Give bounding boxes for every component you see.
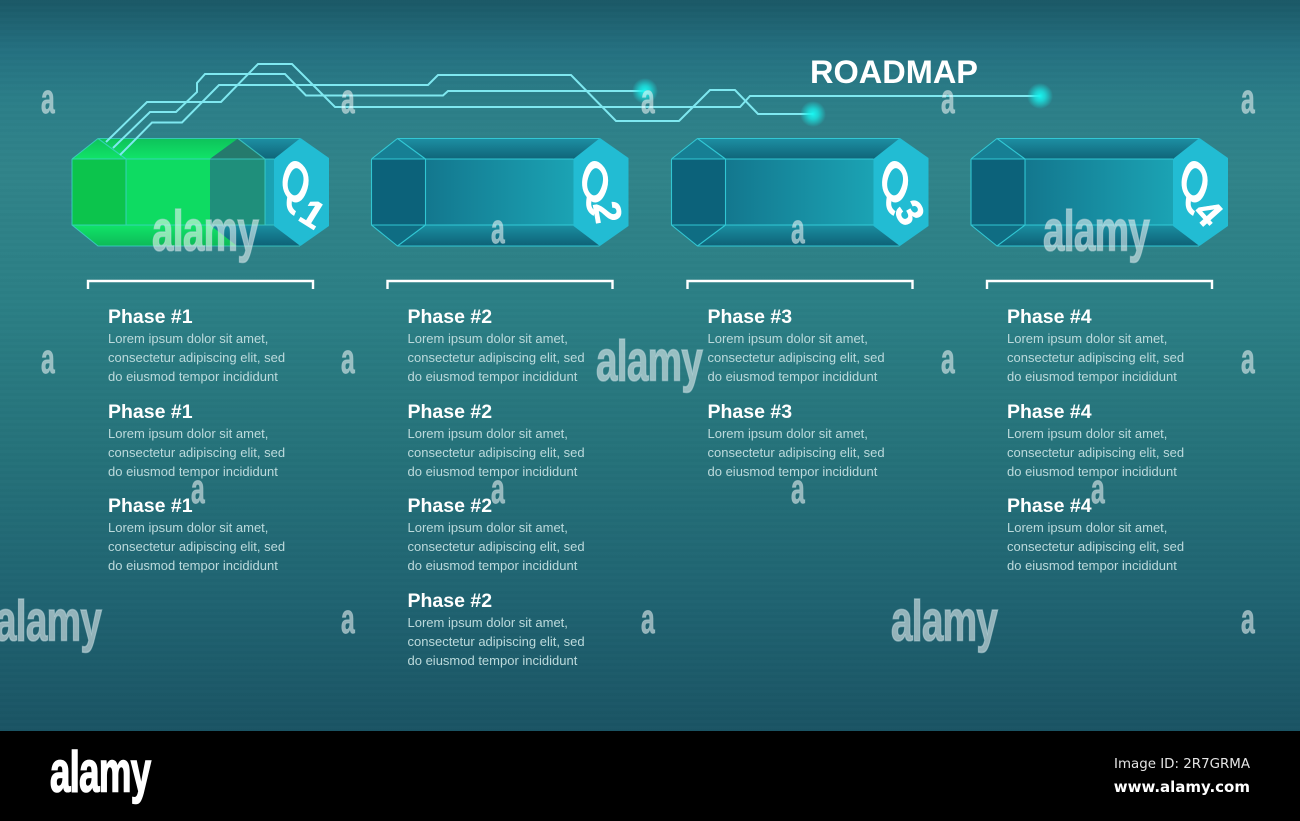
bracket 2	[388, 281, 612, 289]
phase 2 item d: consectetur adipiscing elit, sed	[408, 634, 585, 648]
phase 4 item c: Lorem ipsum dolor sit amet,	[1007, 520, 1167, 535]
phase 1 item c: do eiusmod tempor incididunt	[108, 558, 278, 573]
hexagon end cap Q3	[872, 138, 932, 246]
phase 3 item a: Lorem ipsum dolor sit amet,	[708, 331, 868, 346]
glowing node 3	[1027, 83, 1053, 109]
watermark layer: a	[941, 335, 955, 383]
hexagon end cap Q4: 4	[1185, 191, 1230, 235]
watermark layer: alamy	[891, 590, 997, 654]
phase 1 item a: Phase #1	[108, 306, 193, 328]
phase 2 item a: Lorem ipsum dolor sit amet,	[408, 331, 568, 346]
watermark layer: a	[1241, 335, 1255, 383]
hexagon end cap Q4: Q	[1172, 144, 1217, 221]
phase 3 item a: consectetur adipiscing elit, sed	[708, 350, 885, 365]
phase 2 item a: Phase #2	[408, 306, 492, 328]
watermark layer: alamy	[1043, 200, 1149, 264]
phase 4 item b: Phase #4	[1007, 400, 1092, 422]
phase 2 item d: Phase #2	[408, 590, 492, 612]
phase 4 item a: do eiusmod tempor incididunt	[1007, 369, 1177, 384]
phase 4 item c	[1007, 495, 1184, 573]
phase 1 item b: consectetur adipiscing elit, sed	[108, 444, 285, 460]
circuit lines	[106, 64, 1040, 155]
bracket 4	[987, 281, 1212, 289]
phase 2 item b: consectetur adipiscing elit, sed	[408, 444, 585, 460]
watermark layer: a	[41, 335, 55, 383]
watermark layer: a	[341, 75, 355, 123]
phase 3 item a: Phase #3	[708, 306, 792, 328]
phase 3 item b: Phase #3	[708, 400, 792, 422]
phase 3 item b: Lorem ipsum dolor sit amet,	[708, 426, 868, 440]
phase 1 item a: Lorem ipsum dolor sit amet,	[108, 331, 268, 346]
phase 4 item b: consectetur adipiscing elit, sed	[1007, 444, 1184, 460]
image id: Image ID: 2R7GRMA	[1114, 757, 1250, 772]
watermark layer: a	[191, 465, 205, 513]
footer bar	[0, 731, 1300, 821]
box Q2	[372, 138, 629, 246]
phase 3 item b: do eiusmod tempor incididunt	[708, 464, 877, 478]
watermark layer: a	[1091, 465, 1105, 513]
phase 1 item a	[108, 306, 285, 384]
watermark layer: a	[41, 75, 55, 123]
watermark layer: a	[491, 465, 505, 513]
watermark layer: a	[791, 465, 805, 513]
watermark layer: a	[1241, 75, 1255, 123]
column 2 text	[408, 306, 585, 668]
phase 1 item c: Phase #1	[108, 495, 193, 517]
hexagon end cap Q3: Q	[872, 144, 917, 221]
watermark layer: a	[1241, 595, 1255, 643]
phase 2 item b	[408, 400, 585, 478]
phase 2 item d: Lorem ipsum dolor sit amet,	[408, 614, 568, 630]
phase 3 item a	[708, 306, 885, 384]
watermark layer: a	[791, 205, 805, 253]
phase 2 item d: do eiusmod tempor incididunt	[408, 652, 577, 668]
phase 2 item c: do eiusmod tempor incididunt	[408, 558, 577, 573]
bracket 1	[88, 281, 313, 289]
phase 4 item a	[1007, 306, 1184, 384]
watermark layer: a	[341, 335, 355, 383]
phase 4 item a: Lorem ipsum dolor sit amet,	[1007, 331, 1167, 346]
phase 4 item b	[1007, 400, 1184, 478]
box Q1 with green progress	[72, 138, 332, 246]
column 1 text	[108, 306, 285, 573]
hexagon end cap Q2	[572, 138, 629, 246]
watermark layer: a	[641, 75, 655, 123]
phase 2 item b: do eiusmod tempor incididunt	[408, 464, 577, 478]
phase 2 item a	[408, 306, 585, 384]
phase 2 item a: consectetur adipiscing elit, sed	[408, 350, 585, 365]
phase 1 item c: Lorem ipsum dolor sit amet,	[108, 520, 268, 535]
phase 4 item c: consectetur adipiscing elit, sed	[1007, 539, 1184, 554]
phase 2 item d	[408, 590, 585, 668]
phase 2 item c: Phase #2	[408, 495, 492, 517]
glowing node 2	[800, 101, 826, 127]
box Q4	[971, 138, 1230, 246]
watermark layer: alamy	[152, 200, 258, 264]
phase 2 item b: Lorem ipsum dolor sit amet,	[408, 426, 568, 440]
phase 1 item b: Phase #1	[108, 400, 193, 422]
phase 3 item b: consectetur adipiscing elit, sed	[708, 444, 885, 460]
hexagon end cap Q4	[1172, 138, 1230, 246]
hexagon end cap Q3: 3	[885, 193, 932, 233]
hexagon end cap Q1	[273, 138, 332, 246]
phase 4 item b: do eiusmod tempor incididunt	[1007, 464, 1177, 478]
watermark layer: alamy	[596, 330, 702, 394]
phase 2 item c: consectetur adipiscing elit, sed	[408, 539, 585, 554]
column 3 text	[708, 306, 885, 478]
phase 2 item c: Lorem ipsum dolor sit amet,	[408, 520, 568, 535]
phase 1 item c	[108, 495, 285, 573]
phase 1 item b: Lorem ipsum dolor sit amet,	[108, 426, 268, 440]
bracket 3	[688, 281, 912, 289]
glowing node 1	[632, 78, 658, 104]
phase 2 item b: Phase #2	[408, 400, 492, 422]
phase 4 item a: Phase #4	[1007, 306, 1092, 328]
phase 1 item a: consectetur adipiscing elit, sed	[108, 350, 285, 365]
phase 4 item c: do eiusmod tempor incididunt	[1007, 558, 1177, 573]
phase 2 item a: do eiusmod tempor incididunt	[408, 369, 577, 384]
hexagon end cap Q1: 1	[292, 191, 332, 238]
website: www.alamy.com	[1114, 778, 1250, 796]
phase 1 item b	[108, 400, 285, 478]
footer logo: alamy	[50, 741, 150, 804]
title: ROADMAP	[810, 54, 978, 90]
phase 3 item a: do eiusmod tempor incididunt	[708, 369, 877, 384]
hexagon end cap Q2: Q	[572, 144, 617, 221]
hexagon end cap Q1: Q	[273, 144, 318, 221]
phase 1 item a: do eiusmod tempor incididunt	[108, 369, 278, 384]
phase 4 item b: Lorem ipsum dolor sit amet,	[1007, 426, 1167, 440]
watermark layer: a	[641, 595, 655, 643]
phase 4 item c: Phase #4	[1007, 495, 1092, 517]
green progress fill	[72, 138, 265, 246]
box Q3	[672, 138, 932, 246]
phase 1 item b: do eiusmod tempor incididunt	[108, 464, 278, 478]
phase 4 item a: consectetur adipiscing elit, sed	[1007, 350, 1184, 365]
watermark layer: a	[941, 75, 955, 123]
watermark layer: a	[491, 205, 505, 253]
phase 2 item c	[408, 495, 585, 573]
phase 3 item b	[708, 400, 885, 478]
column 4 text	[1007, 306, 1184, 573]
phase 1 item c: consectetur adipiscing elit, sed	[108, 539, 285, 554]
watermark layer: a	[341, 595, 355, 643]
hexagon end cap Q2: 2	[584, 198, 629, 226]
